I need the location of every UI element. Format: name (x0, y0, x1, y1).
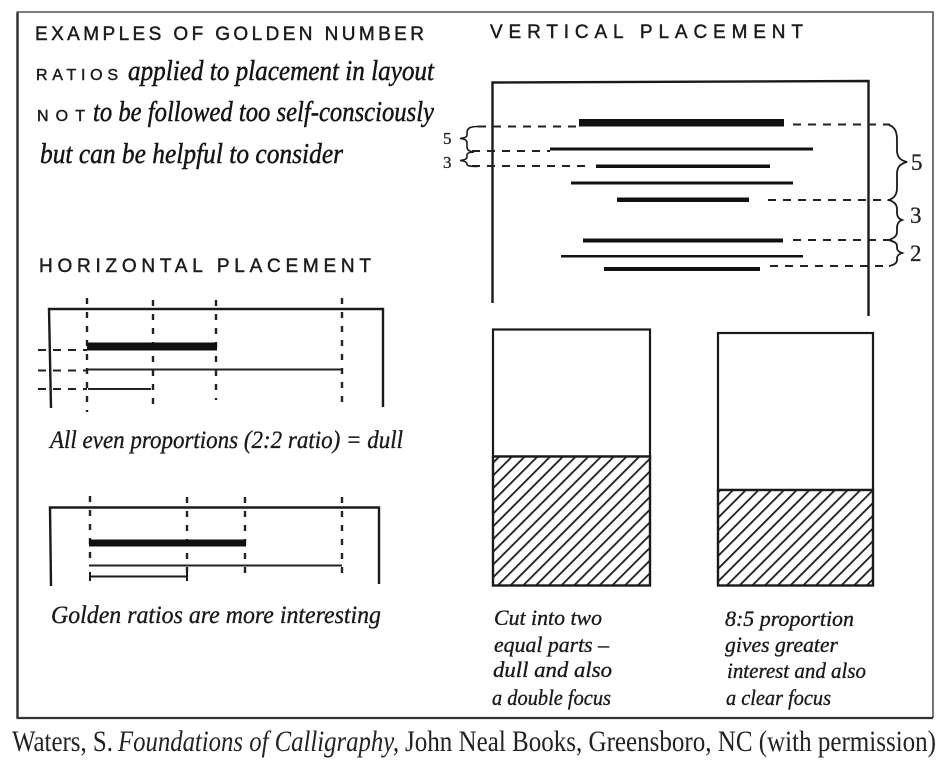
intro text block (35, 24, 435, 170)
caption: 8:5 split: 8:5 proportion (725, 606, 854, 631)
source credit: Foundations of Calligraphy, (117, 725, 399, 758)
text lines (550, 119, 813, 271)
caption: even proportions: All even proportions (2:2 ratio) = dull (48, 427, 403, 454)
page outline (492, 81, 868, 316)
caption: equal split: a double focus (492, 685, 611, 710)
caption: 8:5 split: gives greater (725, 632, 838, 657)
intro text block: but can be helpful to consider (40, 139, 343, 170)
caption: equal split: Cut into two (494, 605, 602, 630)
caption: 8:5 split: a clear focus (726, 685, 831, 710)
right braces with ratio numbers: 2 (910, 241, 922, 266)
intro text block: to be followed too self-consciously (93, 97, 434, 128)
intro text block: NOT (37, 108, 85, 125)
right braces with ratio numbers (889, 125, 922, 266)
caption: equal split: equal parts – (494, 632, 610, 657)
caption: golden ratios: Golden ratios are more interesting (51, 602, 381, 629)
intro text block: applied to placement in layout (128, 56, 435, 87)
caption: 8:5 split (725, 606, 866, 710)
equal split rectangle (493, 330, 650, 586)
horizontal diagram: golden ratios (50, 496, 379, 586)
heading: horizontal placement: HORIZONTAL PLACEMENT (39, 256, 371, 277)
heading: vertical placement: VERTICAL PLACEMENT (490, 22, 803, 43)
intro text block: EXAMPLES OF GOLDEN NUMBER (35, 24, 424, 45)
left braces with ratio numbers: 5 (443, 129, 452, 148)
caption: equal split (492, 605, 612, 710)
8:5 split rectangle (718, 333, 873, 586)
source credit (12, 725, 936, 758)
vertical placement diagram (443, 81, 922, 316)
caption: equal split: dull and also (493, 657, 612, 682)
horizontal diagram: even proportions (38, 298, 383, 412)
caption: 8:5 split: interest and also (727, 658, 866, 683)
right braces with ratio numbers: 3 (910, 203, 922, 228)
intro text block: RATIOS (36, 67, 118, 84)
left braces with ratio numbers (443, 126, 478, 172)
right braces with ratio numbers: 5 (911, 150, 922, 175)
guide dashes (472, 124, 890, 266)
left braces with ratio numbers: 3 (443, 153, 452, 172)
source credit: Waters, S. (12, 725, 113, 758)
